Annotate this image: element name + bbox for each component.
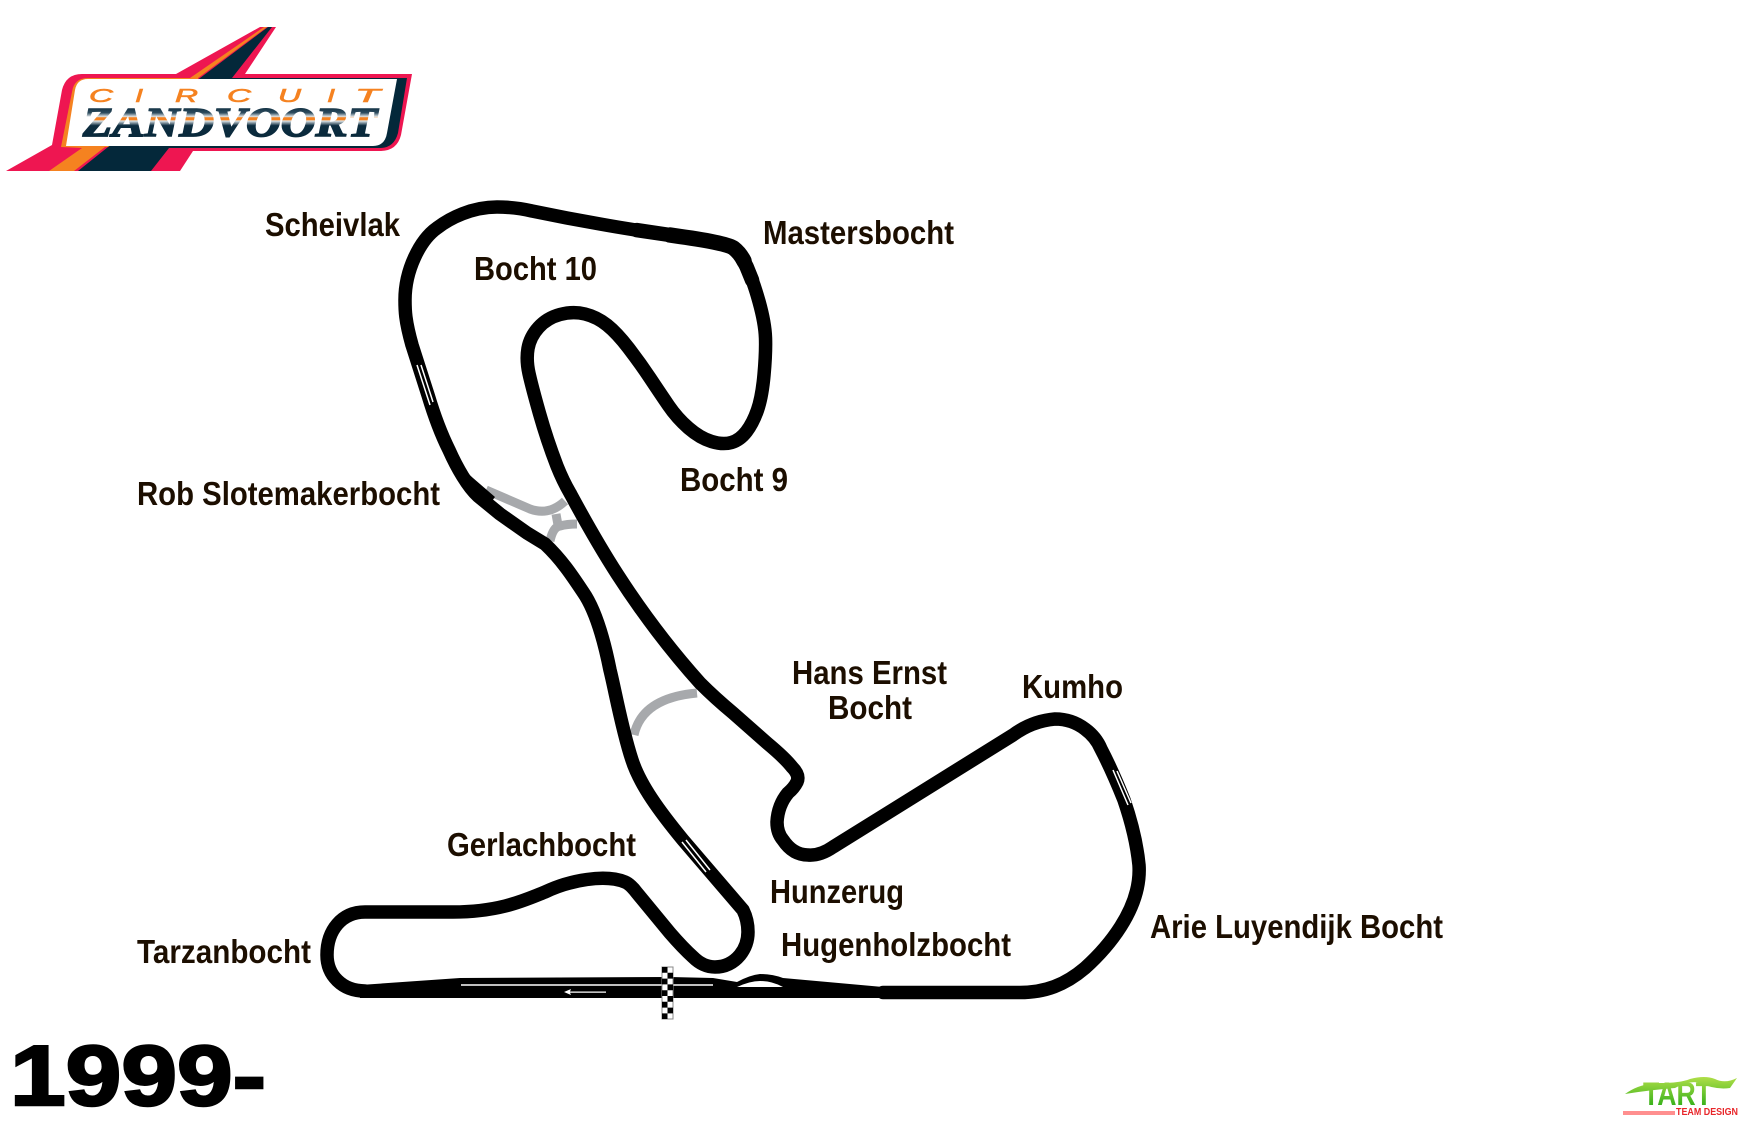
logo orange stripe bbox=[49, 27, 267, 171]
year heading: 1999- bbox=[10, 1029, 266, 1124]
word TART: TART bbox=[1643, 1076, 1712, 1112]
Rob Slotemakerbocht thick junction bbox=[452, 466, 495, 506]
label Bocht 9: Bocht 9 bbox=[680, 461, 788, 498]
chicane gap bbox=[737, 981, 783, 987]
label Hans Ernst Bocht bbox=[792, 654, 947, 726]
label Mastersbocht: Mastersbocht bbox=[763, 214, 954, 251]
direction arrow: Scheivlak side bbox=[417, 365, 433, 405]
label Hugenholzbocht: Hugenholzbocht bbox=[781, 926, 1011, 963]
start finish checkered flag bbox=[662, 967, 673, 1019]
logo word CIRCUIT: T bbox=[355, 86, 385, 106]
logo word CIRCUIT: U bbox=[278, 86, 303, 106]
main circuit line bbox=[327, 207, 1139, 992]
label Arie Luyendijk Bocht: Arie Luyendijk Bocht bbox=[1150, 908, 1443, 945]
logo: Circuit Zandvoort bbox=[6, 27, 412, 171]
logo white panel bbox=[66, 79, 397, 146]
main straight with pit lane bbox=[360, 974, 883, 998]
label Hans Ernst Bocht: Bocht bbox=[828, 689, 912, 726]
label Rob Slotemakerbocht: Rob Slotemakerbocht bbox=[137, 475, 440, 512]
pit lane white line bbox=[461, 984, 713, 986]
label Bocht 10: Bocht 10 bbox=[474, 250, 597, 287]
car outline bbox=[1625, 1077, 1737, 1094]
logo dark navy stripe bbox=[78, 27, 407, 171]
label Hans Ernst Bocht: Hans Ernst bbox=[792, 654, 947, 691]
logo: TART Team Design bbox=[1623, 1076, 1738, 1118]
word TEAM DESIGN: TEAM DESIGN bbox=[1676, 1106, 1738, 1118]
logo word CIRCUIT: C bbox=[227, 86, 253, 106]
red underline bbox=[1623, 1111, 1675, 1115]
direction arrow: Arie Luyendijk side bbox=[1113, 770, 1131, 805]
Mastersbocht widest section bbox=[670, 235, 744, 261]
logo word CIRCUIT: I bbox=[327, 86, 335, 106]
logo red backing shape bbox=[6, 27, 412, 171]
label Scheivlak: Scheivlak bbox=[265, 206, 401, 243]
logo word CIRCUIT: R bbox=[175, 86, 198, 106]
logo word CIRCUIT: C bbox=[89, 86, 115, 106]
track layout bbox=[327, 207, 1139, 1019]
Mastersbocht wider section bbox=[636, 230, 752, 280]
label Kumho: Kumho bbox=[1022, 668, 1123, 705]
direction arrow: main straight bbox=[564, 989, 606, 995]
corner labels bbox=[137, 206, 1443, 970]
logo word CIRCUIT: I bbox=[135, 86, 143, 106]
label Gerlachbocht: Gerlachbocht bbox=[447, 826, 636, 863]
label Hunzerug: Hunzerug bbox=[770, 873, 904, 910]
grey link roads bbox=[486, 490, 697, 735]
logo word CIRCUIT bbox=[89, 86, 385, 106]
direction arrow: back section bbox=[682, 840, 710, 872]
logo word ZANDVOORT: ZANDVOORT bbox=[82, 99, 379, 145]
label Tarzanbocht: Tarzanbocht bbox=[137, 933, 311, 970]
